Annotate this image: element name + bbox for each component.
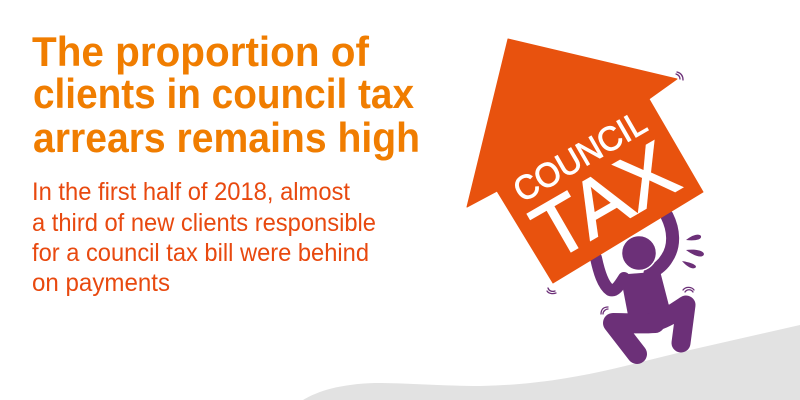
title (32, 28, 420, 161)
right arm (650, 216, 673, 273)
subtitle text: for a council tax bill were behind (32, 239, 369, 267)
person (596, 216, 686, 354)
arrow sign (467, 39, 703, 283)
title: arrears remains high (33, 114, 420, 161)
head (622, 236, 656, 270)
hill (303, 325, 800, 400)
right leg (650, 305, 686, 343)
sign text: council: COUNCIL (507, 104, 653, 210)
sweat drops (682, 235, 704, 268)
illustration: person lifting arrow (467, 39, 704, 354)
title: The proportion of (32, 28, 370, 75)
subtitle text: on payments (32, 269, 170, 297)
left arm (596, 258, 624, 290)
subtitle text: In the first half of 2018, almost (32, 178, 350, 206)
wobble marks (547, 72, 694, 314)
left leg (613, 323, 655, 354)
sign text: tax: TAX (517, 124, 692, 277)
subtitle text (32, 178, 376, 297)
subtitle text: a third of new clients responsible (32, 209, 376, 237)
title: clients in council tax (33, 70, 415, 117)
torso (622, 273, 674, 328)
